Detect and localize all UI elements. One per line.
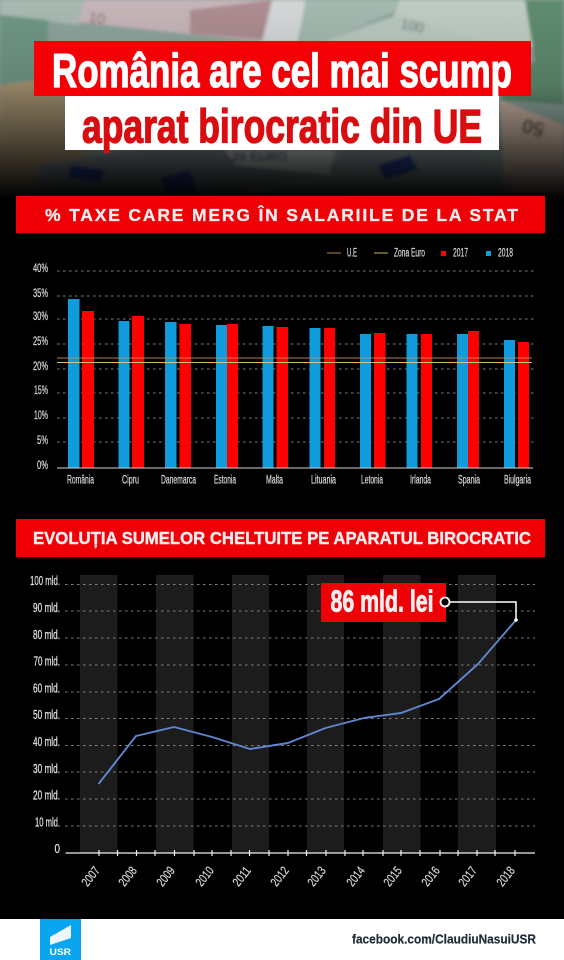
country labels: Estonia — [214, 474, 236, 486]
year labels: 2018 — [494, 864, 518, 889]
heading: spending evolution: EVOLUȚIA SUMELOR CHELTUITE PE APARATUL BIROCRATIC — [33, 528, 531, 548]
data line — [98, 620, 516, 784]
hero photo: euro banknotes — [0, 0, 564, 215]
bars: Estonia — [216, 324, 238, 468]
bars: Irlanda — [406, 334, 432, 468]
legend: U.E — [347, 248, 357, 260]
value axis labels: 60 mld. — [33, 682, 60, 696]
country labels: Irlanda — [410, 474, 431, 486]
value axis labels: 0 — [54, 842, 60, 856]
bar chart: share of taxes by country — [33, 248, 534, 486]
hero photo: euro banknotes: 10 — [87, 9, 106, 28]
value axis labels: 40 mld. — [33, 735, 60, 749]
country labels: România — [67, 474, 94, 486]
country labels: Danemarca — [161, 474, 196, 486]
bars: România — [68, 299, 94, 468]
year labels: 2009 — [154, 864, 178, 889]
percent axis labels: 35% — [33, 288, 48, 300]
facebook address: facebook.com/ClaudiuNasuiUSR — [352, 932, 536, 946]
percent axis labels: 0% — [37, 460, 48, 472]
bars: Malta — [262, 326, 288, 468]
icon: USR logo: USR — [50, 947, 71, 958]
year labels: 2016 — [419, 864, 443, 889]
year labels: 2011 — [230, 864, 254, 889]
percent axis labels: 20% — [33, 361, 48, 373]
bars: Danemarca — [165, 322, 191, 468]
icon: USR logo — [40, 919, 81, 960]
baseline axis — [57, 467, 533, 469]
year labels: 2017 — [456, 864, 480, 889]
year labels: 2012 — [268, 864, 292, 889]
value axis labels: 30 mld. — [33, 762, 60, 776]
percent axis labels: 5% — [37, 435, 48, 447]
percent axis labels: 10% — [34, 410, 48, 422]
footer — [0, 919, 564, 960]
percent gridlines — [57, 271, 534, 442]
legend: Zona Euro — [394, 248, 425, 260]
country labels: Biulgaria — [504, 474, 531, 486]
year labels: 2008 — [116, 864, 140, 889]
value axis labels: 50 mld. — [33, 708, 60, 722]
year labels: 2015 — [381, 864, 405, 889]
year labels: 2010 — [193, 864, 217, 889]
country labels — [67, 474, 531, 486]
percent axis labels: 30% — [33, 311, 48, 323]
heading: spending evolution — [16, 519, 545, 557]
legend: 2018 — [498, 248, 513, 260]
country labels: Malta — [266, 474, 283, 486]
alternating year columns — [80, 575, 496, 853]
bars: Cipru — [118, 316, 144, 468]
country labels: Lituania — [311, 474, 336, 486]
axis with ticks — [66, 850, 535, 856]
reference line: U.E — [57, 357, 532, 359]
value gridlines — [65, 584, 535, 826]
country labels: Letonia — [361, 474, 383, 486]
bars: Letonia — [360, 333, 386, 468]
line chart: spending 2007-2018 — [30, 574, 535, 889]
heading: taxes to state salaries: % TAXE CARE MERG ÎN SALARIILE DE LA STAT — [45, 204, 518, 225]
year labels — [79, 864, 518, 889]
hero photo: euro banknotes: 50 — [520, 113, 547, 140]
legend — [327, 248, 513, 260]
legend: 2017 — [453, 248, 468, 260]
reference line: Zona Euro — [57, 362, 532, 364]
bars: Lituania — [310, 328, 335, 468]
heading: taxes to state salaries — [16, 196, 545, 233]
year labels: 2013 — [305, 864, 329, 889]
value axis labels: 80 mld. — [33, 628, 60, 642]
value axis labels: 90 mld. — [33, 601, 60, 615]
percent axis labels — [33, 263, 48, 472]
percent axis labels: 15% — [34, 385, 48, 397]
country labels: Spania — [458, 474, 480, 486]
value axis labels — [30, 574, 60, 856]
callout: 86 mld. lei — [321, 583, 518, 622]
value axis labels: 70 mld. — [34, 654, 60, 668]
year labels: 2007 — [79, 864, 103, 889]
percent axis labels: 40% — [33, 263, 48, 275]
value axis labels: 10 mld. — [35, 816, 60, 830]
value axis labels: 20 mld. — [33, 788, 60, 802]
country labels: Cipru — [122, 474, 139, 486]
value axis labels: 100 mld. — [30, 574, 60, 588]
bars: Spania — [457, 331, 479, 468]
hero photo: euro banknotes: 20 EURO — [232, 149, 288, 164]
year labels: 2014 — [344, 864, 368, 889]
percent axis labels: 25% — [33, 336, 48, 348]
callout: 86 mld. lei: 86 mld. lei — [330, 584, 434, 618]
hero photo: euro banknotes: 100 — [399, 15, 426, 36]
bars: Bulgaria — [504, 340, 529, 468]
